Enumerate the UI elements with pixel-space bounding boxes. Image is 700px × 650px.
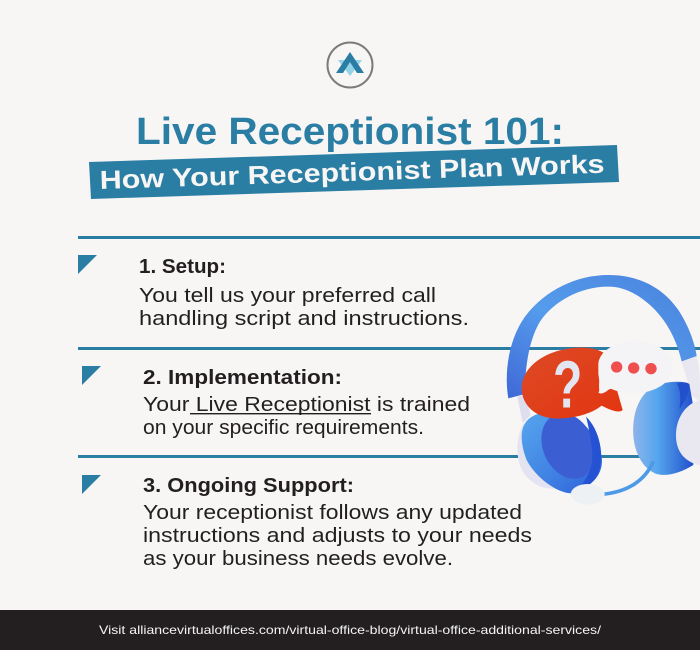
right white arm xyxy=(681,356,700,402)
step 3: ongoing support xyxy=(82,475,532,570)
subtitle banner xyxy=(89,145,619,199)
logo xyxy=(328,42,372,88)
headband xyxy=(507,275,697,398)
step 1: setup: handling script and instructions. xyxy=(139,308,469,330)
step 1: setup: 1. Setup: xyxy=(139,256,226,278)
step 3: ongoing support: 3. Ongoing Support: xyxy=(143,475,354,497)
right white ear pad xyxy=(676,400,700,465)
red question bubble: ? xyxy=(553,348,582,422)
left white arm xyxy=(517,395,531,423)
step 1: setup: You tell us your preferred call xyxy=(139,285,436,307)
step 2: implementation: Your Live Receptionist is trained xyxy=(143,394,470,416)
step 2: implementation xyxy=(82,366,470,439)
step 2: implementation: on your specific requirements. xyxy=(143,417,424,439)
microphone xyxy=(571,484,605,505)
step 2: implementation: 2. Implementation: xyxy=(143,367,342,389)
step 3: ongoing support: Your receptionist follows any updated xyxy=(143,502,522,524)
left ear cup xyxy=(517,405,605,493)
step 1: setup xyxy=(78,255,469,330)
red question bubble xyxy=(522,348,623,422)
icon: headset with speech bubbles xyxy=(507,275,700,505)
microphone boom xyxy=(602,461,653,494)
subtitle banner: How Your Receptionist Plan Works xyxy=(99,149,605,195)
step 3: ongoing support: instructions and adjusts to your needs xyxy=(143,525,532,547)
footer bar: Visit alliancevirtualoffices.com/virtual-office-blog/virtual-office-additional-services/ xyxy=(99,623,602,637)
footer bar xyxy=(0,610,700,650)
title: Live Receptionist 101: xyxy=(136,111,564,153)
right ear cup xyxy=(633,382,700,475)
section dividers xyxy=(78,236,700,458)
step 3: ongoing support: as your business needs evolve. xyxy=(143,548,453,570)
white ellipsis bubble xyxy=(598,341,673,393)
